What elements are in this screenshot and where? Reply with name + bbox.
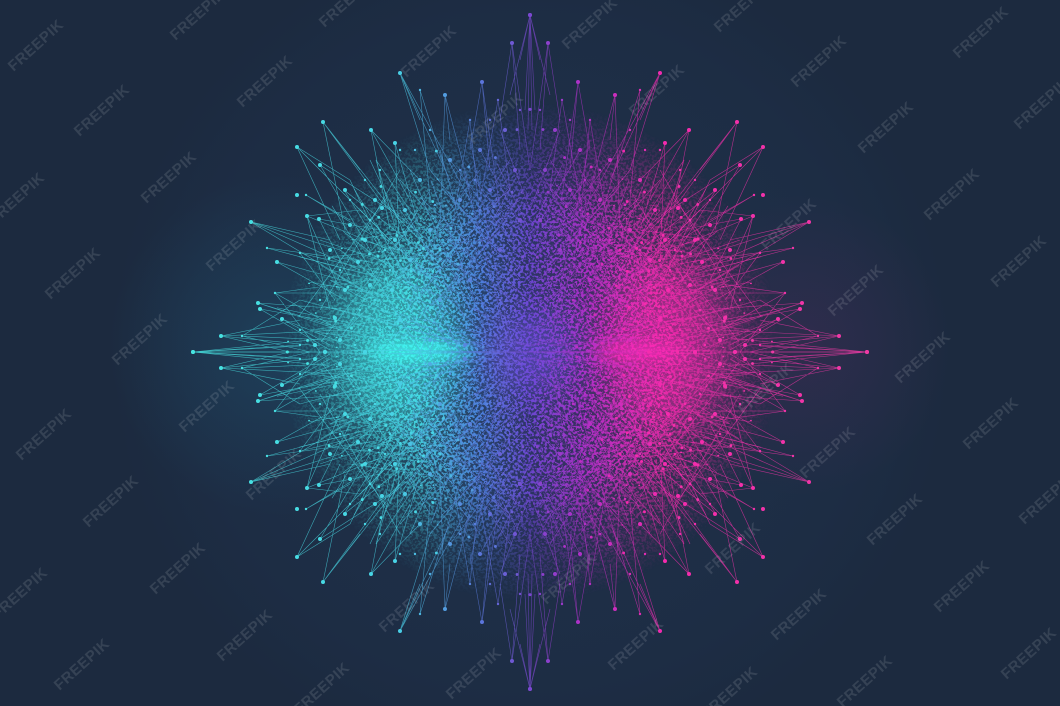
watermark text grid: FREEPIK — [398, 22, 460, 81]
watermark text grid: FREEPIK — [465, 89, 527, 148]
watermark text grid: FREEPIK — [988, 232, 1050, 291]
watermark text grid: FREEPIK — [758, 195, 820, 254]
watermark text grid: FREEPIK — [538, 549, 600, 608]
watermark text grid: FREEPIK — [234, 52, 296, 111]
cyan and magenta glow — [335, 263, 725, 427]
right half nodes — [530, 15, 867, 689]
left half network: cyan spikes — [193, 15, 530, 689]
left half nodes — [193, 15, 530, 689]
watermark text grid: FREEPIK — [605, 615, 667, 674]
right half network: magenta spikes — [530, 15, 867, 689]
watermark text grid: FREEPIK — [998, 624, 1060, 683]
watermark text grid: FREEPIK — [855, 98, 917, 157]
watermark text grid: FREEPIK — [376, 577, 438, 636]
watermark text grid: FREEPIK — [138, 148, 200, 207]
watermark text grid: FREEPIK — [13, 405, 75, 464]
watermark text grid: FREEPIK — [950, 3, 1012, 62]
watermark text grid: FREEPIK — [735, 359, 797, 418]
watermark text grid: FREEPIK — [147, 539, 209, 598]
watermark text grid: FREEPIK — [109, 310, 171, 369]
watermark text grid: FREEPIK — [176, 377, 238, 436]
watermark text grid: FREEPIK — [931, 557, 993, 616]
watermark text grid: FREEPIK — [788, 32, 850, 91]
watermark text grid: FREEPIK — [80, 472, 142, 531]
watermark text grid: FREEPIK — [71, 81, 133, 140]
watermark text grid: FREEPIK — [892, 328, 954, 387]
watermark text grid: FREEPIK — [797, 423, 859, 482]
watermark text grid: FREEPIK — [42, 244, 104, 303]
watermark text grid: FREEPIK — [864, 490, 926, 549]
watermark text grid: FREEPIK — [768, 585, 830, 644]
watermark text grid: FREEPIK — [626, 61, 688, 120]
watermark text grid: FREEPIK — [203, 216, 265, 275]
watermark text grid: FREEPIK — [243, 445, 305, 504]
watermark text grid: FREEPIK — [960, 394, 1022, 453]
sphere core: colour gradient body — [280, 102, 780, 602]
watermark text grid: FREEPIK — [5, 16, 67, 75]
watermark text grid: FREEPIK — [443, 644, 505, 703]
watermark text grid: FREEPIK — [214, 606, 276, 665]
watermark text grid: FREEPIK — [825, 261, 887, 320]
watermark text grid: FREEPIK — [921, 165, 983, 224]
watermark text grid: FREEPIK — [51, 635, 113, 694]
watermark text grid: FREEPIK — [702, 519, 764, 578]
